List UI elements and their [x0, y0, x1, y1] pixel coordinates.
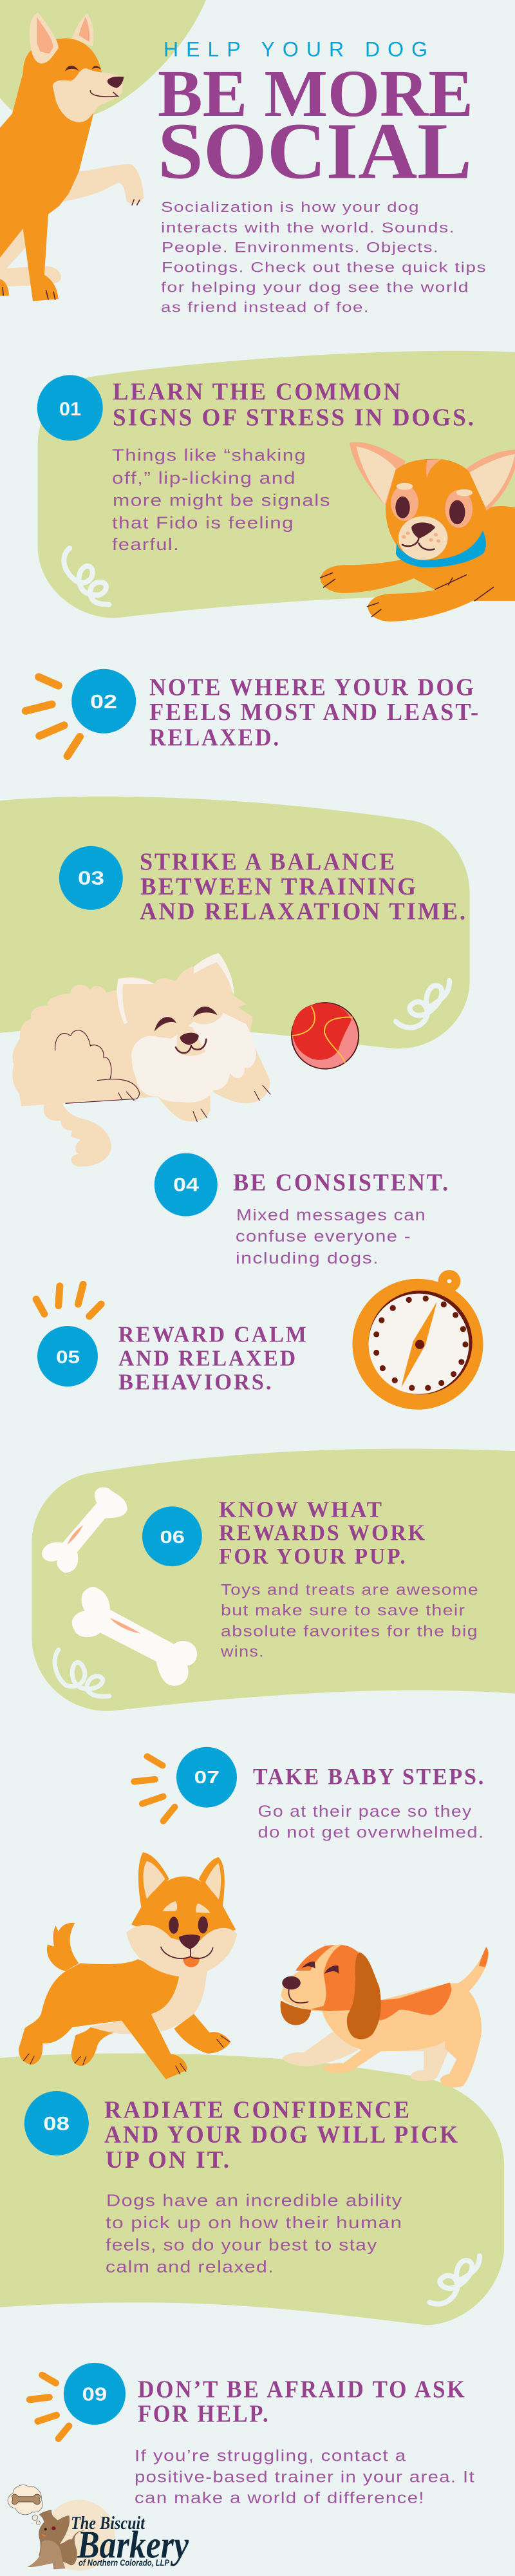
heading: step 4: BE CONSISTENT. — [233, 1170, 450, 1197]
heading: step 3: STRIKE A BALANCE — [140, 848, 397, 875]
badge 05 — [37, 1326, 98, 1387]
icon: orange rays step 7 — [134, 1756, 174, 1821]
text: step 6 — [220, 1582, 479, 1660]
heading: step 2: FEELS MOST AND LEAST- — [149, 699, 480, 726]
text: step 6: but make sure to save their — [221, 1602, 466, 1620]
text: step 4: confuse everyone - — [236, 1227, 411, 1245]
heading: step 6: REWARDS WORK — [219, 1520, 427, 1545]
badge 04: 04 — [173, 1175, 199, 1195]
heading: step 9: FOR HELP. — [138, 2400, 270, 2427]
text: step 1: Things like “shaking — [112, 446, 306, 465]
heading: step 9: DON’T BE AFRAID TO ASK — [138, 2376, 466, 2403]
heading: step 3: BETWEEN TRAINING — [140, 873, 418, 900]
text: step 9 — [135, 2447, 475, 2507]
heading: step 1: SIGNS OF STRESS IN DOGS. — [113, 404, 476, 431]
logo: the biscuit barkery: The Biscuit — [71, 2514, 145, 2533]
heading: step 7: TAKE BABY STEPS. — [253, 1763, 485, 1789]
text: step 1: fearful. — [112, 535, 180, 554]
heading: step 8: UP ON IT. — [106, 2146, 231, 2174]
text: step 8: Dogs have an incredible ability — [106, 2191, 403, 2210]
intro text: as friend instead of foe. — [161, 299, 370, 315]
heading: step 3 — [140, 848, 467, 925]
text: step 4: Mixed messages can — [236, 1206, 426, 1224]
illustration: chihuahua lying down — [320, 442, 515, 621]
heading: step 6: FOR YOUR PUP. — [219, 1544, 407, 1569]
badge 01 — [37, 375, 103, 440]
hero green blob — [0, 0, 206, 125]
icon: red ball — [292, 1003, 359, 1069]
illustration: fluffy pomeranian — [12, 953, 270, 1167]
text: step 1 — [112, 446, 331, 554]
heading: step 1: LEARN THE COMMON — [113, 378, 402, 405]
icon: orange compass — [352, 1270, 483, 1410]
icon: orange rays step 9 — [30, 2375, 69, 2439]
title: be more social — [158, 57, 473, 196]
badge 06: 06 — [160, 1527, 185, 1547]
logo: the biscuit barkery — [8, 2485, 189, 2571]
heading: step 8: AND YOUR DOG WILL PICK — [104, 2121, 460, 2148]
illustration: sitting orange dog — [0, 12, 144, 301]
text: step 8 — [106, 2191, 403, 2276]
heading: help your dog: HELP YOUR DOG — [164, 38, 427, 61]
icon: orange rays step 2 — [26, 677, 80, 756]
heading: step 5 — [118, 1322, 308, 1395]
badge 06 — [142, 1506, 202, 1566]
panel: step 8 background — [0, 2053, 504, 2325]
intro text: for helping your dog see the world — [161, 279, 469, 295]
text: step 9: If you’re struggling, contact a — [135, 2447, 407, 2465]
badge 04 — [154, 1153, 218, 1217]
text: step 8: to pick up on how their human — [106, 2213, 403, 2232]
heading: step 5: BEHAVIORS. — [118, 1370, 273, 1395]
intro text: Socialization is how your dog — [161, 199, 420, 215]
text: step 6: absolute favorites for the big — [221, 1623, 478, 1640]
intro text: interacts with the world. Sounds. — [161, 220, 455, 236]
heading: step 6 — [219, 1497, 427, 1569]
heading: step 2 — [149, 674, 480, 751]
text: step 4 — [236, 1206, 426, 1267]
text: step 1: that Fido is feeling — [112, 513, 294, 532]
heading: step 5: AND RELAXED — [118, 1345, 297, 1370]
icon: two white bones — [42, 1487, 197, 1686]
heading: step 9 — [138, 2376, 466, 2427]
badge 08 — [24, 2091, 89, 2155]
badge 03 — [59, 846, 123, 910]
illustration: beagle puppy — [281, 1944, 489, 2087]
text: step 6: Toys and treats are awesome — [221, 1582, 479, 1598]
badge 07: 07 — [194, 1767, 220, 1787]
badge 07 — [176, 1747, 237, 1808]
panel: step 6 background — [32, 1449, 515, 1711]
intro text: Footings. Check out these quick tips — [162, 260, 487, 276]
heading: step 8: RADIATE CONFIDENCE — [104, 2097, 411, 2124]
badge 02 — [71, 669, 136, 734]
title: be more social: SOCIAL — [158, 108, 472, 196]
text: step 8: feels, so do your best to stay — [106, 2235, 378, 2254]
heading: step 2: RELAXED. — [149, 724, 281, 751]
heading: step 8 — [104, 2097, 460, 2174]
text: step 7: do not get overwhelmed. — [258, 1823, 484, 1841]
heading: step 6: KNOW WHAT — [219, 1497, 384, 1522]
illustration: orange shiba puppy — [19, 1852, 237, 2079]
badge 09: 09 — [82, 2384, 107, 2405]
text: step 9: can make a world of difference! — [135, 2489, 425, 2507]
text: step 7: Go at their pace so they — [258, 1803, 473, 1821]
badge 02: 02 — [90, 692, 117, 712]
intro text — [161, 199, 487, 315]
title: be more social: BE MORE — [158, 57, 473, 131]
logo: the biscuit barkery: Barkery — [77, 2524, 189, 2566]
text: step 6: wins. — [220, 1643, 265, 1660]
heading: step 2: NOTE WHERE YOUR DOG — [149, 674, 476, 701]
panel: step 3 background — [0, 797, 470, 1048]
heading: step 5: REWARD CALM — [118, 1322, 308, 1347]
panel: step 1 background — [38, 351, 515, 618]
text: step 1: off,” lip-licking and — [112, 468, 296, 488]
badge 08: 08 — [43, 2113, 70, 2134]
intro text: People. Environments. Objects. — [162, 240, 439, 256]
logo: the biscuit barkery: of Northern Colorado, LLP — [79, 2557, 170, 2568]
badge 03: 03 — [78, 868, 104, 889]
text: step 4: including dogs. — [236, 1249, 379, 1267]
heading: step 1 — [113, 378, 476, 431]
badge 09 — [64, 2363, 126, 2425]
text: step 1: more might be signals — [113, 491, 331, 510]
badge 05: 05 — [56, 1347, 80, 1367]
text: step 7 — [258, 1803, 484, 1841]
heading: step 3: AND RELAXATION TIME. — [140, 898, 467, 925]
text: step 9: positive-based trainer in your area. It — [135, 2468, 475, 2486]
badge 01: 01 — [59, 399, 81, 420]
text: step 8: calm and relaxed. — [106, 2257, 274, 2276]
icon: orange rays step 5 — [36, 1284, 101, 1316]
